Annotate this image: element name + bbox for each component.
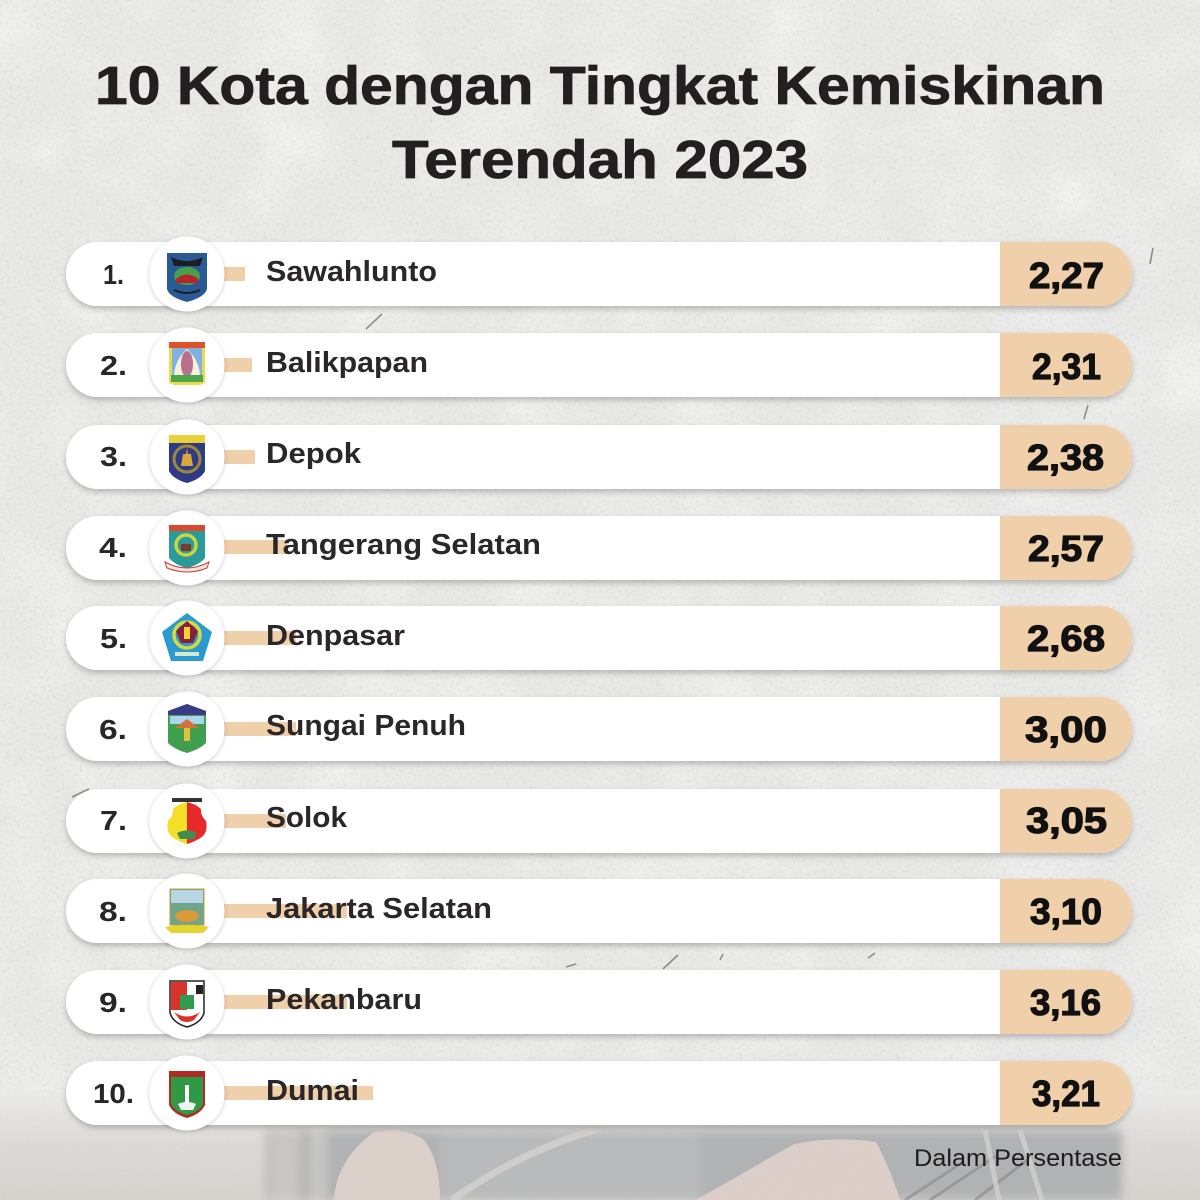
row 2: Balikpapan: 2. (100, 350, 127, 381)
row 10: Dumai: 10. (93, 1078, 134, 1109)
row 8: Jakarta Selatan: 3,10 (1030, 891, 1102, 932)
background: faded photo at bottom (0, 1100, 1200, 1200)
icon: Sawahlunto emblem (167, 253, 207, 302)
row 4: Tangerang Selatan: 2,57 (1028, 528, 1104, 569)
icon: Depok emblem (169, 435, 205, 483)
row 7: Solok: 7. (100, 805, 127, 836)
icon: Denpasar emblem (162, 613, 212, 661)
unit note: Dalam Persentase (914, 1145, 1122, 1172)
icon: Dumai emblem (169, 1071, 205, 1118)
row 10: Dumai: Dumai (266, 1075, 359, 1107)
row 6: Sungai Penuh (66, 692, 1132, 766)
row 5: Denpasar (66, 600, 1132, 676)
row 9: Pekanbaru (66, 964, 1132, 1040)
icon: Solok emblem (167, 798, 207, 844)
row 1: Sawahlunto (66, 236, 1132, 312)
row 8: Jakarta Selatan: Jakarta Selatan (266, 893, 492, 925)
row 9: Pekanbaru: Pekanbaru (266, 984, 422, 1016)
row 4: Tangerang Selatan: 4. (99, 532, 127, 563)
icon: Pekanbaru emblem (170, 981, 204, 1027)
title: 10 Kota dengan Tingkat Kemiskinan (95, 56, 1105, 116)
title: Terendah 2023 (392, 130, 808, 190)
row 6: Sungai Penuh: 3,00 (1025, 709, 1107, 750)
row 9: Pekanbaru: 3,16 (1030, 982, 1101, 1023)
row 4: Tangerang Selatan (66, 510, 1132, 586)
row 7: Solok: Solok (266, 802, 348, 834)
row 3: Depok: Depok (266, 438, 362, 470)
row 4: Tangerang Selatan: Tangerang Selatan (266, 529, 541, 561)
row 2: Balikpapan (66, 328, 1132, 402)
row 2: Balikpapan: 2,31 (1032, 346, 1101, 387)
row 8: Jakarta Selatan: 8. (99, 896, 127, 927)
row 10: Dumai (66, 1056, 1132, 1130)
row 6: Sungai Penuh: Sungai Penuh (266, 710, 466, 742)
icon: Sungai Penuh emblem (168, 704, 206, 753)
icon: Balikpapan emblem (169, 342, 205, 385)
row 3: Depok: 3. (100, 441, 127, 472)
row 9: Pekanbaru: 9. (99, 987, 127, 1018)
row 6: Sungai Penuh: 6. (99, 714, 127, 745)
row 5: Denpasar: 2,68 (1027, 618, 1105, 659)
row 7: Solok (66, 784, 1132, 858)
row 3: Depok: 2,38 (1027, 437, 1104, 478)
row 1: Sawahlunto: 2,27 (1029, 255, 1104, 296)
icon: Tangerang Selatan emblem (165, 525, 209, 572)
row 5: Denpasar: Denpasar (266, 620, 405, 652)
row 7: Solok: 3,05 (1026, 800, 1107, 841)
title (95, 56, 1105, 190)
row 10: Dumai: 3,21 (1032, 1073, 1100, 1114)
icon: Jakarta Selatan emblem (165, 889, 209, 933)
row 3: Depok (66, 420, 1132, 494)
row 8: Jakarta Selatan (66, 874, 1132, 948)
row 2: Balikpapan: Balikpapan (266, 347, 428, 379)
row 1: Sawahlunto: 1. (103, 259, 124, 290)
row 1: Sawahlunto: Sawahlunto (266, 256, 437, 288)
row 5: Denpasar: 5. (100, 623, 127, 654)
